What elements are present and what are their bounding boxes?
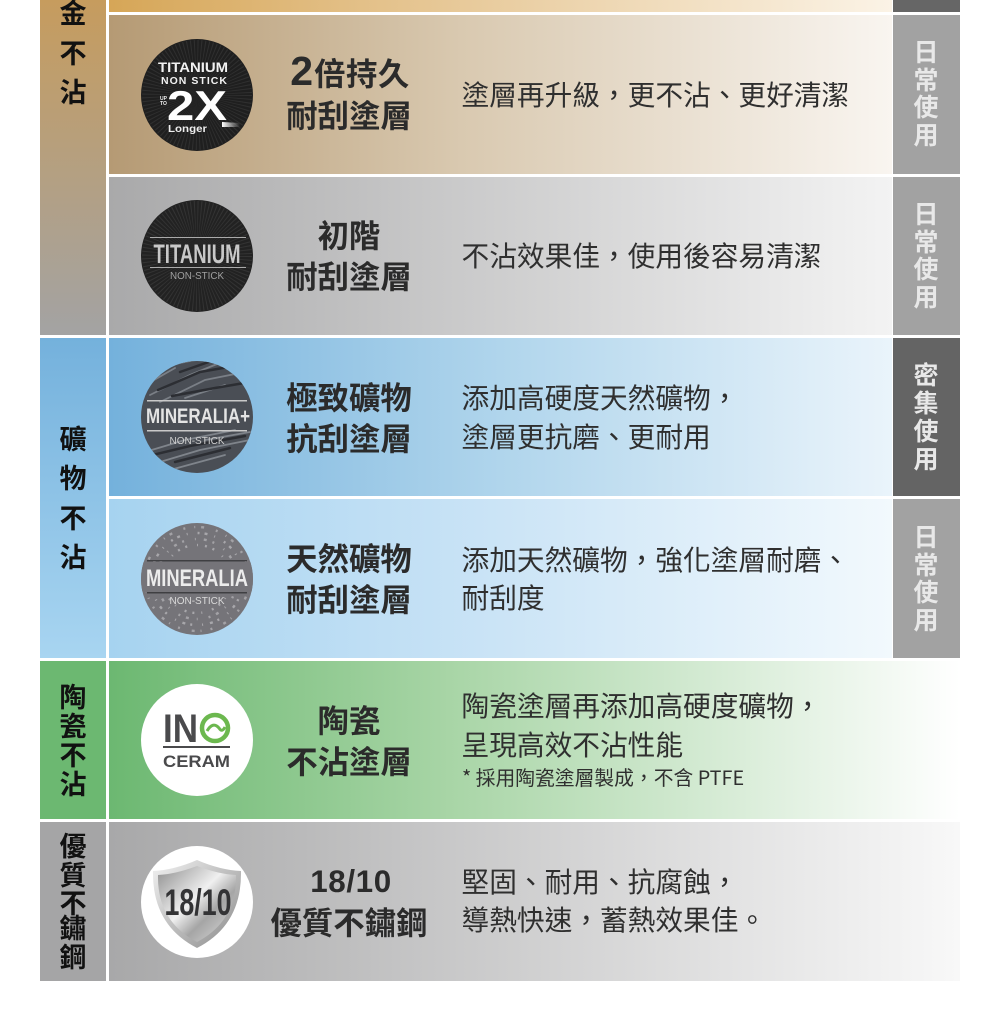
row: stainless steel [109, 822, 960, 981]
icon: inoceram badge: CERAM [163, 752, 230, 771]
description: 塗層更抗磨、更耐用 [462, 422, 711, 453]
description [462, 383, 738, 453]
icon: mineralia badge [141, 523, 253, 635]
left category: premium stainless steel: 鋼 [60, 943, 86, 973]
usage tab: 日 [913, 39, 939, 67]
description: 呈現高效不沾性能 [462, 730, 683, 761]
description [462, 691, 821, 791]
usage tab: 用 [913, 446, 939, 474]
heading: 耐刮塗層 [286, 583, 412, 618]
row: mineralia plus [109, 338, 960, 496]
usage tab: 使 [913, 94, 939, 122]
left category: gold non-stick: 不 [60, 39, 86, 69]
description: 添加高硬度天然礦物， [462, 383, 738, 414]
left category: ceramic non-stick: 沾 [60, 770, 86, 800]
left category: premium stainless steel: 優 [60, 832, 86, 862]
heading [271, 864, 427, 941]
usage tab: 使 [913, 579, 939, 607]
icon: titanium badge [141, 200, 253, 312]
description: 堅固、耐用、抗腐蝕， [462, 867, 738, 898]
left category: mineral non-stick: 物 [60, 464, 86, 494]
left category: mineral non-stick: 不 [60, 504, 86, 534]
icon: titanium 2X badge [141, 39, 253, 151]
icon: 18/10 shield badge: 18/10 [164, 882, 232, 923]
usage tab: 日 [913, 201, 939, 229]
heading: 2倍持久 [290, 48, 410, 94]
description [462, 545, 849, 614]
left category: ceramic non-stick [40, 661, 106, 819]
heading: 陶瓷 [318, 704, 380, 739]
row: ceramic [109, 661, 960, 819]
icon: titanium 2X badge: Longer [168, 123, 207, 135]
heading [286, 542, 412, 618]
usage tab: 用 [913, 607, 939, 635]
usage tab: 常 [913, 552, 939, 580]
left category: mineral non-stick [40, 338, 106, 658]
heading: 優質不鏽鋼 [271, 906, 427, 941]
heading [286, 381, 412, 457]
left category: gold non-stick [40, 0, 106, 335]
icon: titanium 2X badge: UP [160, 96, 168, 102]
top cropped usage tab [893, 0, 960, 12]
row: 2x titanium [109, 15, 960, 174]
left category: premium stainless steel: 質 [60, 861, 86, 891]
heading: 不沾塗層 [286, 745, 412, 780]
usage tab [893, 177, 960, 335]
heading: 耐刮塗層 [286, 260, 412, 295]
usage tab [893, 15, 960, 174]
heading [286, 219, 412, 295]
left category: ceramic non-stick: 不 [60, 741, 86, 771]
heading [286, 48, 412, 134]
icon: titanium 2X badge: TITANIUM [158, 59, 228, 75]
top cropped row band [109, 0, 892, 12]
description: 耐刮度 [462, 583, 545, 614]
heading: 抗刮塗層 [286, 422, 412, 457]
icon: mineralia plus badge: NON-STICK [170, 435, 224, 447]
description: 陶瓷塗層再添加高硬度礦物， [462, 691, 821, 722]
left category: ceramic non-stick: 瓷 [60, 712, 86, 742]
icon: titanium badge: NON-STICK [170, 270, 224, 282]
row: mineralia [109, 499, 960, 658]
left category: mineral non-stick: 沾 [60, 543, 86, 573]
icon: titanium 2X badge: TO [160, 101, 167, 107]
icon: inoceram badge [141, 684, 253, 796]
icon: inoceram badge: IN [163, 707, 198, 751]
usage tab: 常 [913, 67, 939, 95]
icon: mineralia plus badge: MINERALIA+ [146, 405, 250, 428]
icon: mineralia badge: MINERALIA [146, 565, 248, 592]
left category: gold non-stick: 沾 [60, 78, 86, 108]
usage tab: 使 [913, 418, 939, 446]
heading: 初階 [318, 219, 380, 254]
usage tab: 用 [913, 284, 939, 312]
heading [286, 704, 412, 780]
icon: 18/10 shield badge [141, 846, 253, 958]
left category: premium stainless steel: 不 [60, 889, 86, 919]
description [462, 867, 766, 936]
usage tab: 密 [913, 361, 939, 390]
description: 不沾效果佳，使用後容易清潔 [462, 241, 821, 272]
icon: titanium badge: TITANIUM [154, 239, 240, 269]
icon: titanium 2X badge: NON STICK [161, 75, 227, 87]
usage tab: 常 [913, 229, 939, 257]
left category: mineral non-stick: 礦 [60, 425, 86, 455]
heading: 天然礦物 [286, 542, 412, 577]
description: * 採用陶瓷塗層製成，不含 PTFE [462, 762, 744, 791]
usage tab [893, 499, 960, 658]
usage tab: 使 [913, 256, 939, 284]
left category: premium stainless steel [40, 822, 106, 981]
description: 添加天然礦物，強化塗層耐磨、 [462, 545, 849, 576]
usage tab: 集 [913, 390, 939, 418]
left category: premium stainless steel: 鏽 [60, 914, 86, 944]
left category: ceramic non-stick: 陶 [60, 683, 86, 713]
description: 導熱快速，蓄熱效果佳。 [462, 905, 766, 936]
heading: 耐刮塗層 [286, 99, 412, 134]
row: titanium [109, 177, 960, 335]
description: 塗層再升級，更不沾、更好清潔 [462, 80, 849, 111]
icon: mineralia plus badge [140, 358, 253, 473]
icon: titanium 2X badge: 2X [167, 82, 227, 129]
usage tab: 日 [913, 524, 939, 552]
icon: mineralia badge: NON-STICK [170, 595, 224, 607]
heading: 18/10 [310, 864, 392, 899]
usage tab [893, 338, 960, 496]
heading: 極致礦物 [286, 381, 412, 416]
usage tab: 用 [913, 122, 939, 150]
